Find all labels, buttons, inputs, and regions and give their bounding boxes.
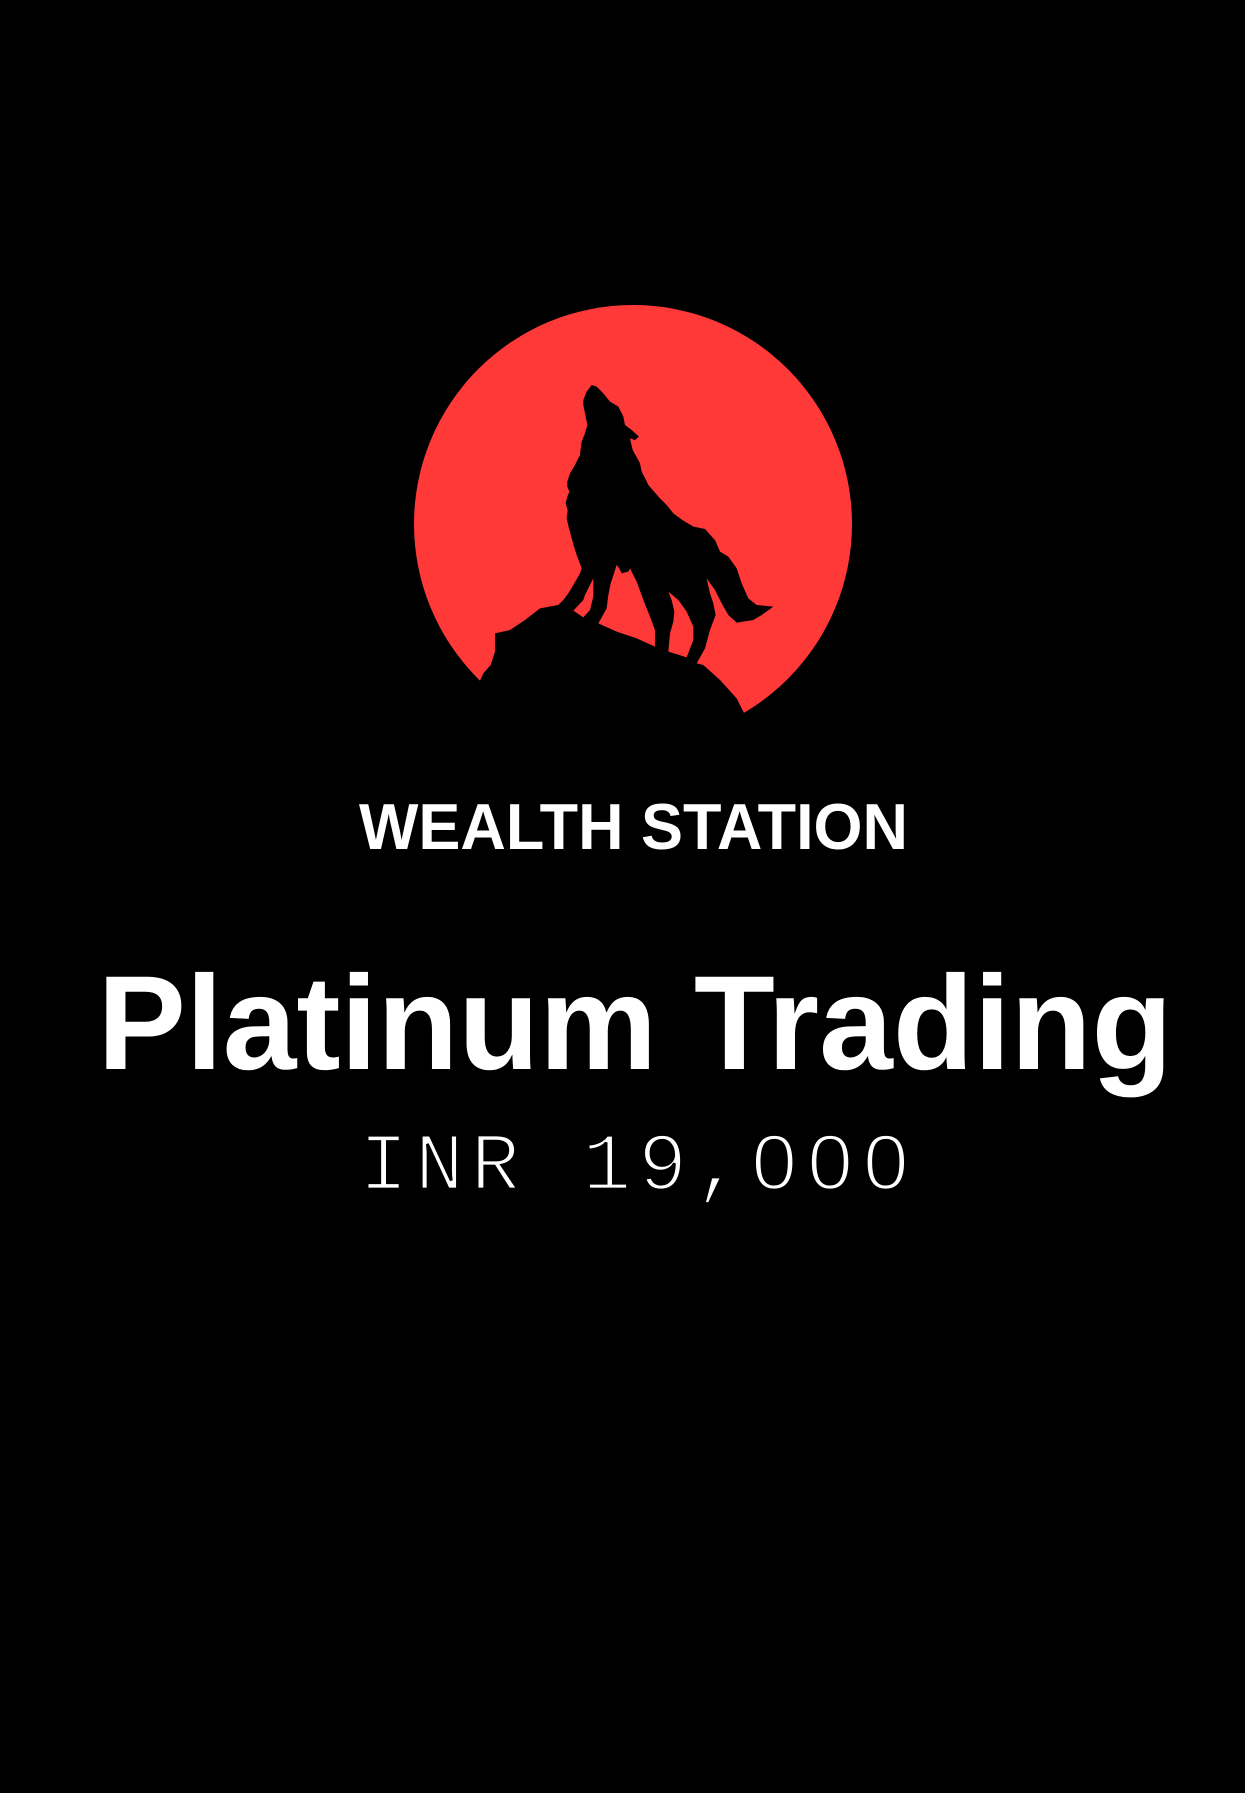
gap under belly xyxy=(598,565,655,647)
red moon xyxy=(414,305,852,743)
gap between hind legs xyxy=(668,592,693,657)
title: Platinum Trading xyxy=(98,949,1172,1098)
price: INR 19,000 xyxy=(359,1121,917,1214)
brand name: WEALTH STATION xyxy=(359,790,908,863)
logo: wolf howling at red moon xyxy=(414,305,852,763)
gap between front legs xyxy=(573,578,593,617)
wolf and hill silhouette xyxy=(480,385,773,763)
